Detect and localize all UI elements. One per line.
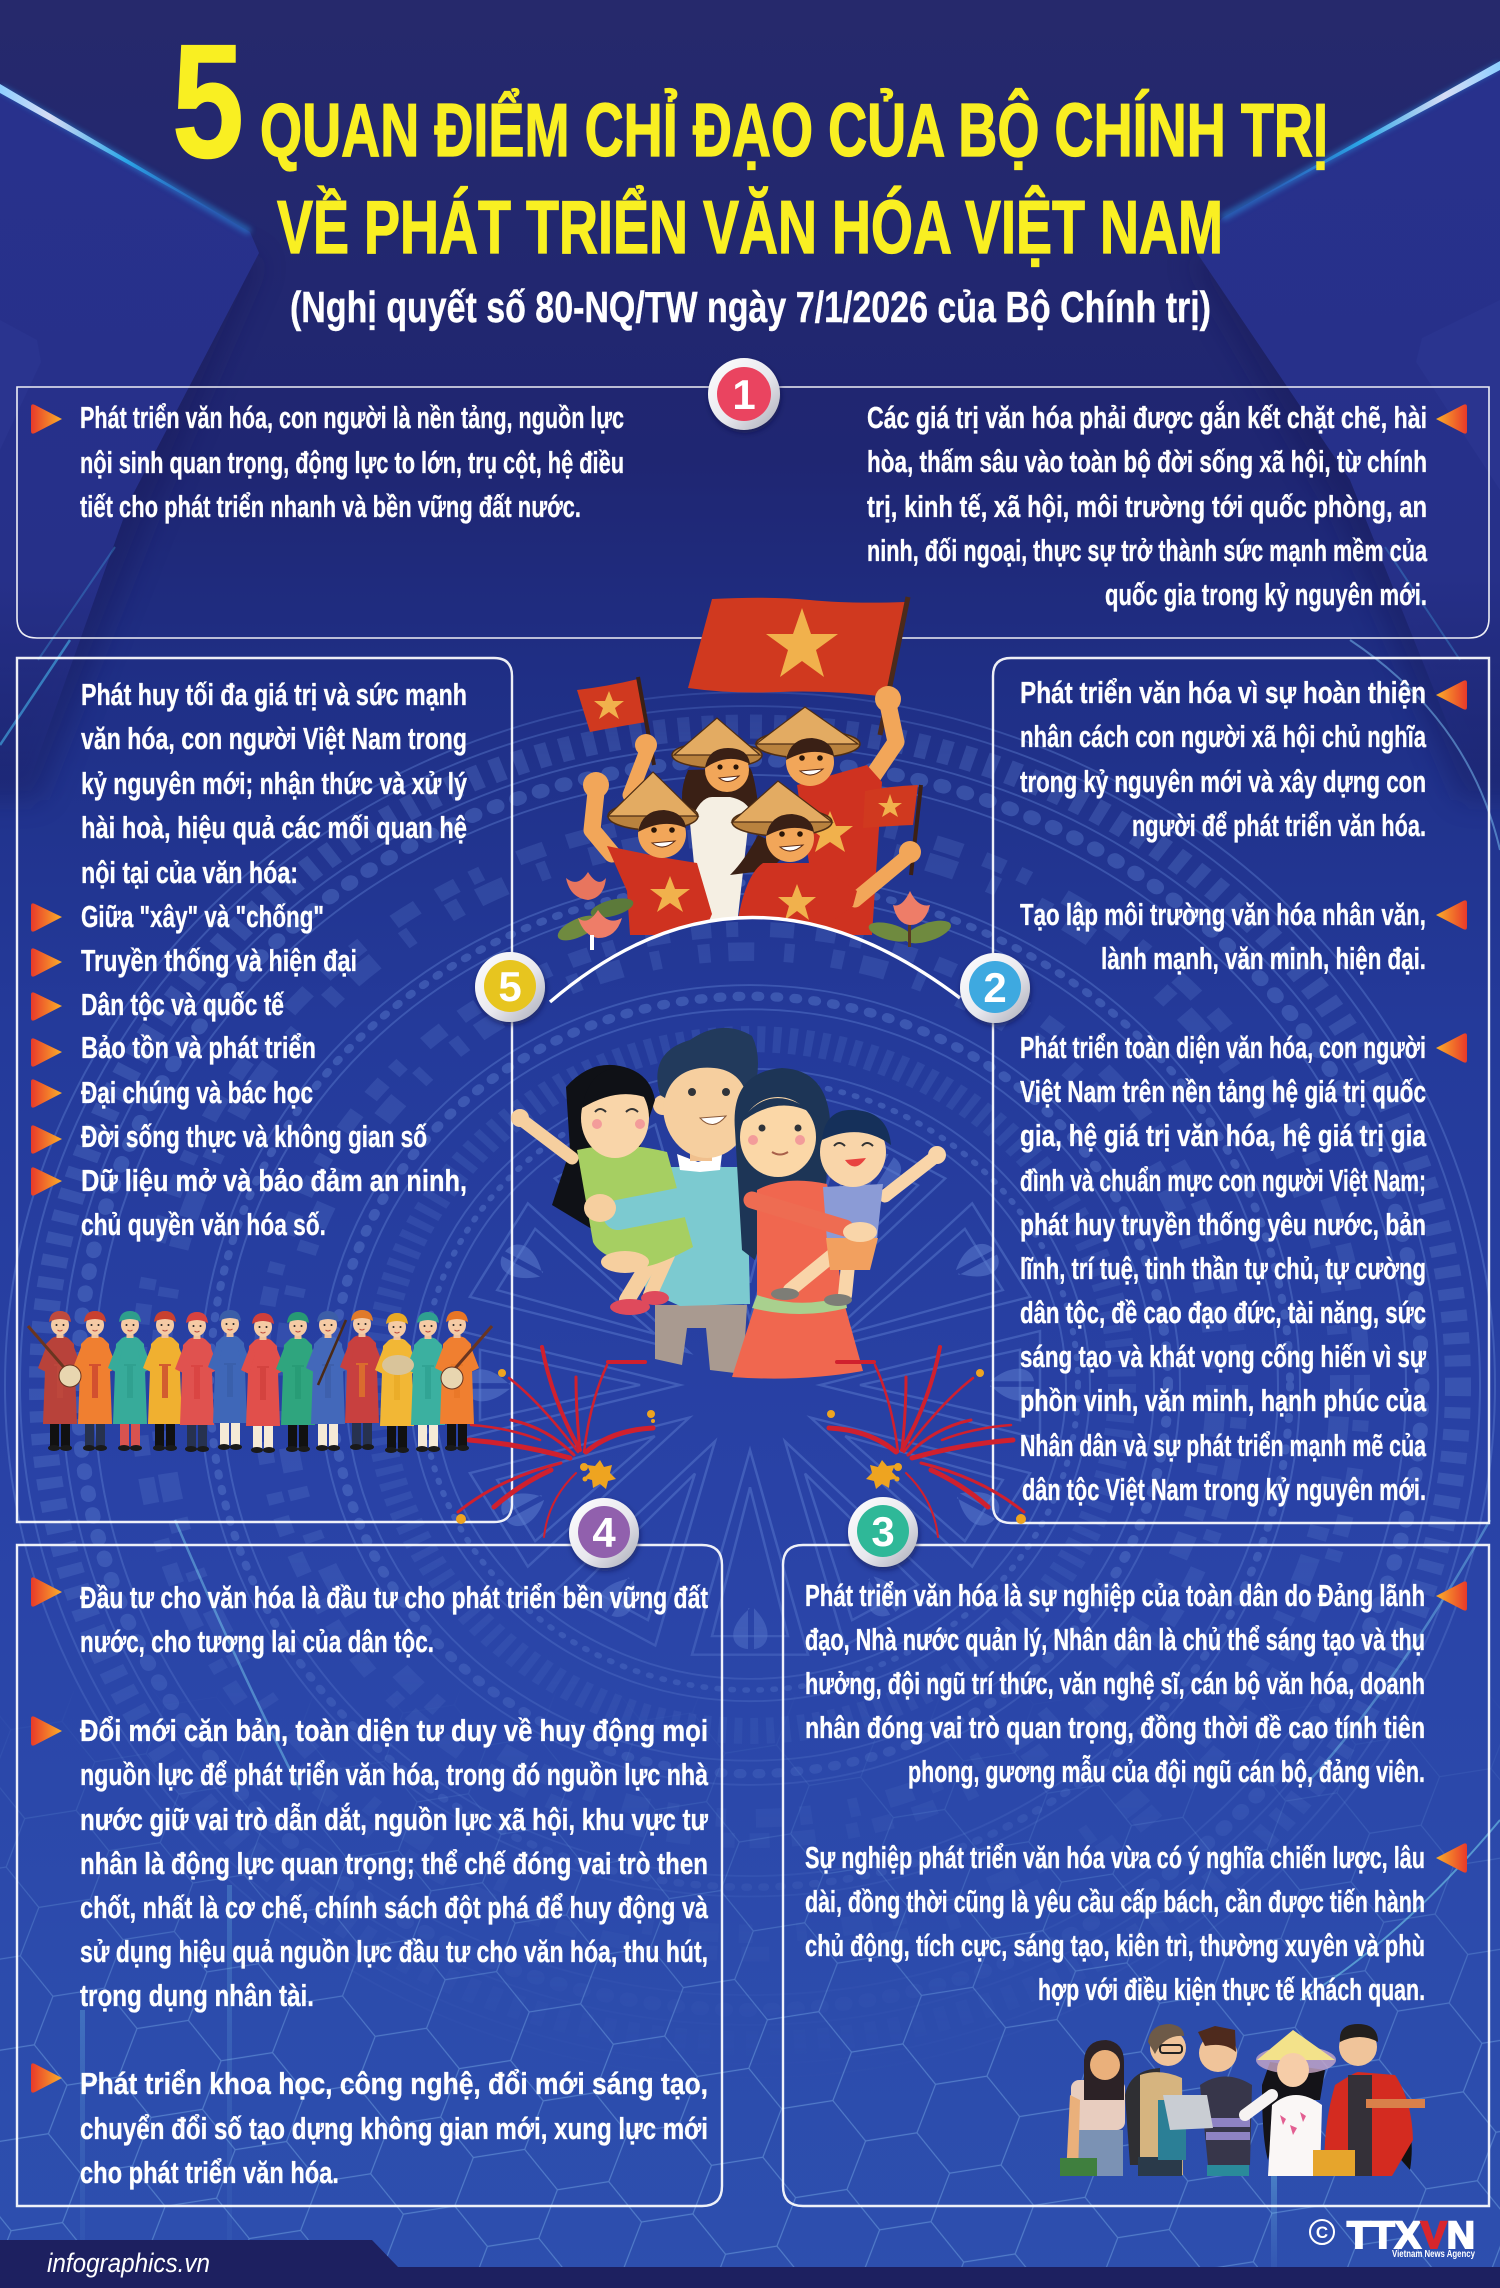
- arrow bullet right: [1436, 404, 1467, 434]
- intro text: Phát huy tối đa giá trị và sức mạnh: [81, 677, 467, 712]
- background: glowing beams: [80, 1520, 1500, 2268]
- illustration: family: [511, 1028, 946, 1379]
- fireworks left: [456, 1347, 655, 1537]
- father arm holding: [584, 1190, 745, 1273]
- arrow bullets: [31, 1577, 62, 2093]
- left text block: nội sinh quan trọng, động lực to lớn, trụ cột, hệ điều: [80, 445, 624, 480]
- badge 1: [708, 358, 780, 430]
- large number 5: 5: [172, 11, 244, 192]
- bottom bar: [0, 2240, 1500, 2288]
- list text: Đời sống thực và không gian số: [81, 1119, 427, 1154]
- badge 2: [960, 953, 1030, 1023]
- background: bronze drum pattern: [4, 692, 1496, 1879]
- instruments: [28, 1320, 492, 1389]
- panel 5 outline: [17, 658, 512, 1522]
- paragraph 2: sử dụng hiệu quả nguồn lực đầu tư cho văn hóa, thu hút,: [80, 1934, 708, 1969]
- paragraph 2: [1020, 897, 1426, 976]
- intro text: nội tại của văn hóa:: [81, 855, 298, 890]
- arrow bullets: [1436, 1581, 1467, 1873]
- badge 5: 5: [498, 963, 522, 1010]
- background: right wing shapes: [1190, 65, 1500, 800]
- TTXVN logo: C: [1316, 2223, 1328, 2242]
- list text: Dữ liệu mở và bảo đảm an ninh,: [81, 1163, 467, 1198]
- header title: [172, 11, 1328, 332]
- panel 1 outline: [17, 387, 1489, 638]
- paragraph 2: Đổi mới căn bản, toàn diện tư duy về huy động mọi: [80, 1713, 708, 1748]
- paragraph 2: trọng dụng nhân tài.: [80, 1978, 314, 2013]
- curved divider arc: [550, 917, 960, 1002]
- intro text: [81, 677, 468, 890]
- paragraph 3: [1020, 1030, 1427, 1507]
- small flag left: [577, 677, 654, 765]
- panel 3 outline: [783, 1545, 1489, 2206]
- list text: Dân tộc và quốc tế: [81, 987, 285, 1022]
- paragraph 1: nước, cho tương lai của dân tộc.: [80, 1624, 434, 1659]
- paragraph 1: Đầu tư cho văn hóa là đầu tư cho phát triển bền vững đất: [80, 1580, 708, 1615]
- student: woman in conical hat and ao dai: [1245, 2030, 1336, 2176]
- fireworks right: [827, 1347, 1026, 1537]
- person: man front left: [583, 772, 712, 935]
- list text: [81, 899, 467, 1242]
- badge 5: [475, 952, 545, 1022]
- paragraph 1: [1020, 675, 1427, 843]
- arrow bullet: [31, 404, 62, 434]
- background: light rays: [0, 61, 1500, 850]
- intro text: kỷ nguyên mới; nhận thức và xử lý: [81, 766, 468, 801]
- background: hexagon network: [0, 1745, 1500, 2267]
- badge 2: 2: [983, 964, 1007, 1011]
- panel outlines: [17, 387, 1489, 2206]
- paragraph 2: nhân là động lực quan trọng; thể chế đóng vai trò then: [80, 1846, 708, 1881]
- panel 2 outline: [993, 658, 1489, 1523]
- left text block: [80, 400, 624, 524]
- left text block: Phát triển văn hóa, con người là nền tảng, nguồn lực: [80, 400, 624, 435]
- panel 4 text: [31, 1577, 709, 2190]
- intro text: hài hoà, hiệu quả các mối quan hệ: [81, 810, 467, 845]
- mother arm holding: [752, 1200, 877, 1242]
- lotus flowers left: [554, 872, 635, 950]
- panel 3 text: [805, 1578, 1467, 2007]
- list text: chủ quyền văn hóa số.: [81, 1207, 326, 1242]
- arrow bullets: [31, 903, 62, 1196]
- small flag right: [878, 784, 923, 876]
- panel 1 text: [31, 399, 1467, 612]
- paragraph 3: chuyển đổi số tạo dựng không gian mới, xung lực mới: [80, 2111, 708, 2146]
- paragraph 2: nguồn lực để phát triển văn hóa, trong đó nguồn lực nhà: [80, 1757, 709, 1792]
- paragraph 3: Phát triển khoa học, công nghệ, đổi mới sáng tạo,: [80, 2066, 708, 2101]
- mother: [732, 1068, 863, 1379]
- list text: Giữa "xây" và "chống": [81, 899, 324, 934]
- badge 3: [848, 1497, 918, 1567]
- illustration: young people group: [1060, 2024, 1425, 2176]
- paragraph 2: [805, 1840, 1425, 2007]
- paragraph 2: nước giữ vai trò dẫn dắt, nguồn lực xã hội, khu vực tư: [80, 1801, 708, 1837]
- right text block: [867, 399, 1428, 612]
- badge 3: 3: [871, 1508, 895, 1555]
- background: left wing shapes: [0, 90, 262, 800]
- person: woman in white: [630, 718, 762, 925]
- subtitle: (Nghị quyết số 80-NQ/TW ngày 7/1/2026 của Bộ Chính trị): [290, 283, 1211, 332]
- list text: Truyền thống và hiện đại: [81, 943, 357, 978]
- illustration: row of people in ao dai: [28, 1310, 492, 1453]
- intro text: văn hóa, con người Việt Nam trong: [81, 721, 467, 756]
- big flag: [688, 597, 908, 735]
- list text: Bảo tồn và phát triển: [81, 1030, 316, 1065]
- laptop: [1163, 2095, 1213, 2130]
- panel 5 text: [31, 677, 468, 1242]
- illustration: group of people with flags: [554, 597, 954, 950]
- person: woman front right: [730, 781, 921, 925]
- panel 4 outline: [17, 1545, 722, 2206]
- paragraph 3: cho phát triển văn hóa.: [80, 2155, 339, 2190]
- student: man with backpack: [1125, 2024, 1186, 2176]
- arrow bullets: [1436, 680, 1467, 1063]
- paragraph 1: [805, 1578, 1425, 1789]
- father: [645, 1028, 758, 1374]
- son: [771, 1110, 946, 1306]
- badge 1: 1: [732, 371, 756, 418]
- TTXVN logo: TTXVN: [1347, 2215, 1475, 2257]
- student: woman with book: [1060, 2040, 1125, 2176]
- daughter: [511, 1065, 693, 1315]
- paragraph 3: [80, 2066, 708, 2190]
- student: man in dark sweater: [1198, 2026, 1252, 2176]
- badge 4: 4: [592, 1509, 616, 1556]
- list text: Đại chúng và bác học: [81, 1075, 313, 1110]
- paragraph 1: [80, 1580, 708, 1659]
- left text block: tiết cho phát triển nhanh và bền vững đất nước.: [80, 489, 581, 524]
- person: man in red shirt at back: [756, 686, 901, 935]
- student: man in red jacket: [1313, 2024, 1425, 2176]
- TTXVN logo: Vietnam News Agency: [1392, 2249, 1475, 2260]
- badge 4: [569, 1498, 639, 1568]
- website label: infographics.vn: [47, 2248, 210, 2278]
- panel 2 text: [1020, 675, 1467, 1507]
- paragraph 2: chốt, nhất là cơ chế, chính sách đột phá để huy động và: [80, 1890, 709, 1925]
- paragraph 2: [80, 1713, 709, 2013]
- lotus flower right: [867, 891, 954, 948]
